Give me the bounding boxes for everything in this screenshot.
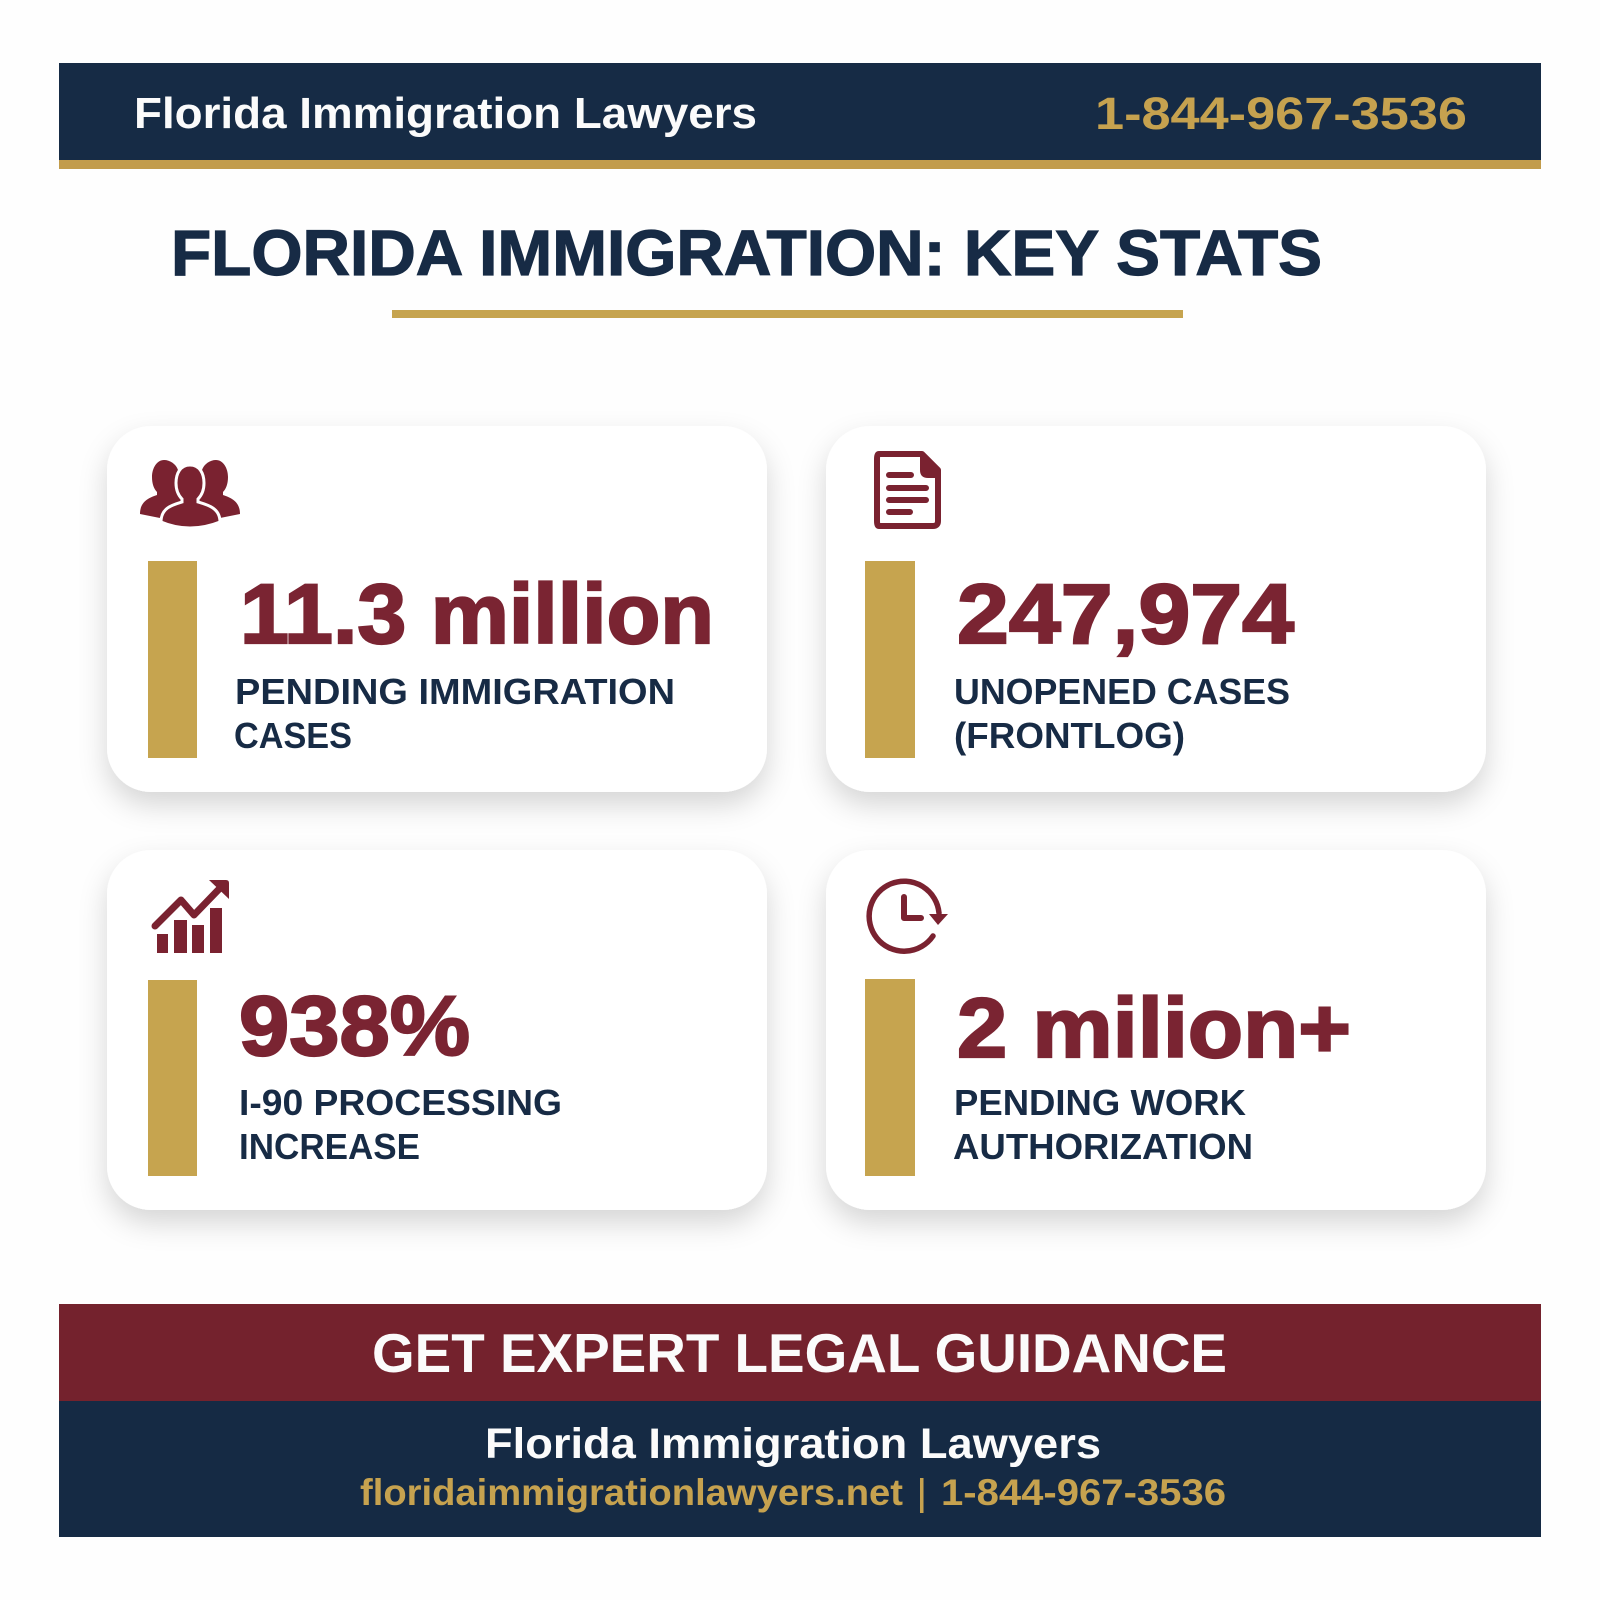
title underline <box>392 310 1183 318</box>
top header band <box>59 63 1541 169</box>
statistic label: I-90 PROCESSING <box>239 1082 562 1123</box>
header phone number: 1-844-967-3536 <box>1095 88 1467 139</box>
footer website: floridaimmigrationlawyers.net <box>360 1472 903 1513</box>
statistic value: 2 milion+ <box>957 981 1351 1075</box>
accent bar <box>148 980 197 1176</box>
statistic label line two: CASES <box>234 715 352 756</box>
accent bar <box>865 561 915 758</box>
footer phone: 1-844-967-3536 <box>941 1472 1226 1513</box>
header firm name: Florida Immigration Lawyers <box>134 89 757 138</box>
icon: clock with arrow <box>869 881 948 951</box>
main title: FLORIDA IMMIGRATION: KEY STATS <box>171 217 1322 289</box>
statistic value: 247,974 <box>957 567 1294 661</box>
panel: pending immigration cases <box>107 426 767 792</box>
panel: unopened cases <box>826 426 1486 792</box>
footer firm name: Florida Immigration Lawyers <box>485 1420 1101 1468</box>
call to action heading: GET EXPERT LEGAL GUIDANCE <box>372 1322 1227 1384</box>
accent bar <box>148 561 197 758</box>
footer divider <box>920 1478 924 1513</box>
icon: group of people <box>140 460 240 528</box>
statistic label line two: (FRONTLOG) <box>954 715 1185 756</box>
accent bar <box>865 979 915 1176</box>
statistic label: UNOPENED CASES <box>954 671 1290 712</box>
icon: document <box>877 451 941 526</box>
panel: I-90 processing increase <box>107 850 767 1210</box>
call to action band <box>59 1304 1541 1401</box>
icon: rising bar chart <box>155 880 229 953</box>
statistic label: PENDING IMMIGRATION <box>235 671 675 712</box>
footer contact band <box>59 1401 1541 1537</box>
statistic label line two: INCREASE <box>239 1126 420 1167</box>
statistic value: 11.3 million <box>240 567 714 661</box>
statistic value: 938% <box>239 979 470 1073</box>
panel: pending work authorization <box>826 850 1486 1210</box>
statistic label: PENDING WORK <box>954 1082 1246 1123</box>
statistic label line two: AUTHORIZATION <box>953 1126 1253 1167</box>
